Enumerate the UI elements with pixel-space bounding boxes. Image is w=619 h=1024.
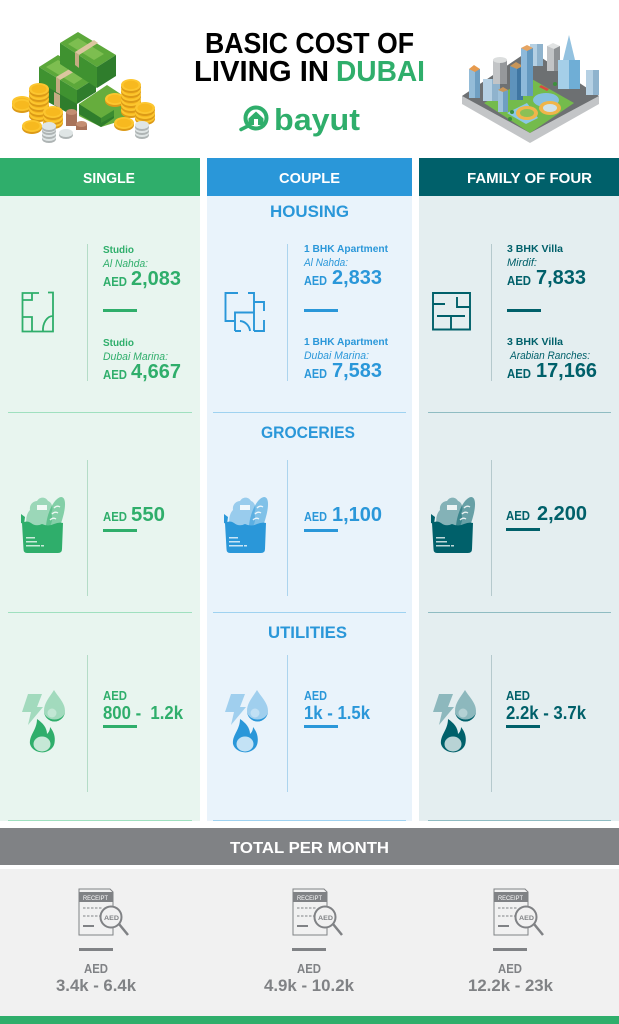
total: family of four: 12.2k - 23k (468, 976, 554, 995)
housing prices: couple: 1 BHK Apartment (304, 336, 388, 348)
header: single (0, 158, 200, 196)
illustration: money and coins (12, 32, 155, 143)
header: family of four: FAMILY OF FOUR (467, 170, 592, 187)
utilities price: single: 800 - 1.2k (103, 703, 184, 723)
icon: groceries (21, 497, 65, 553)
groceries price: single (103, 504, 165, 532)
housing prices: couple: 7,583 (332, 360, 382, 382)
total: single (56, 889, 137, 995)
utilities price: family (506, 689, 587, 728)
panel: couple column (207, 158, 412, 821)
groceries price: family: 2,200 (537, 503, 587, 525)
heading: total per month (0, 828, 619, 865)
utilities price: couple: AED (304, 689, 327, 703)
groceries price: couple (304, 504, 382, 532)
icon: receipt: RECEIPT (83, 895, 108, 902)
icon: studio floor plan (22, 292, 53, 332)
housing prices: family: Mirdif: (507, 257, 537, 269)
header: family of four (419, 158, 619, 196)
groceries price: single: AED (103, 510, 127, 524)
housing prices: family: 3 BHK Villa (507, 243, 563, 255)
icon: villa floor plan (433, 293, 470, 330)
groceries price: couple: AED (304, 510, 327, 524)
utilities price: family: 2.2k - 3.7k (506, 703, 587, 723)
panel: family of four column (419, 158, 619, 821)
header: single: SINGLE (83, 170, 135, 187)
housing prices: family: AED (507, 274, 531, 288)
housing prices: single: AED (103, 275, 127, 289)
total: family of four: AED (498, 962, 522, 976)
icon: receipt (293, 889, 342, 935)
housing prices: single: AED (103, 368, 127, 382)
groceries price: family (506, 503, 587, 531)
housing prices: family (507, 243, 597, 382)
header: couple (207, 158, 412, 196)
housing prices: family: 7,833 (536, 267, 586, 289)
icon: receipt: AED (318, 915, 333, 922)
utilities price: family: AED (506, 689, 530, 703)
housing prices: single: 4,667 (131, 361, 181, 383)
logo: bayut (241, 102, 360, 137)
total: couple (264, 889, 355, 995)
footer bar (0, 1016, 619, 1024)
icon: groceries (224, 497, 268, 553)
housing prices: single (102, 244, 181, 383)
heading: utilities: UTILITIES (268, 623, 347, 642)
total: couple: 4.9k - 10.2k (264, 976, 355, 995)
utilities price: single (103, 689, 184, 728)
heading: groceries: GROCERIES (261, 423, 355, 442)
housing prices: couple: Al Nahda: (303, 257, 348, 269)
icon: utilities (225, 690, 268, 752)
housing prices: single: Dubai Marina: (103, 351, 168, 363)
heading: total per month: TOTAL PER MONTH (230, 840, 389, 857)
utilities price: couple: 1k - 1.5k (304, 703, 371, 723)
title: BASIC COST OF (205, 28, 414, 60)
groceries price: family: AED (506, 509, 530, 523)
icon: utilities (433, 690, 476, 752)
housing prices: family: Arabian Ranches: (509, 350, 590, 362)
housing prices: couple: 2,833 (332, 267, 382, 289)
title: DUBAI (336, 56, 425, 88)
total: family of four (468, 889, 554, 995)
logo: bayut: bayut (274, 102, 360, 137)
illustration: city block (462, 35, 599, 143)
icon: utilities (22, 690, 65, 752)
utilities price: single: AED (103, 689, 127, 703)
icon: one bedroom floor plan (226, 293, 264, 331)
total: single: 3.4k - 6.4k (56, 976, 137, 995)
utilities price: couple (304, 689, 371, 728)
housing prices: couple: AED (304, 367, 327, 381)
groceries price: couple: 1,100 (332, 504, 382, 526)
housing prices: family: 17,166 (536, 360, 597, 382)
housing prices: couple: Dubai Marina: (304, 350, 369, 362)
housing prices: couple: AED (304, 274, 327, 288)
icon: groceries (431, 497, 475, 553)
housing prices: family: AED (507, 367, 531, 381)
icon: receipt: RECEIPT (297, 895, 322, 902)
icon: receipt: AED (519, 915, 534, 922)
panel: total per month (0, 828, 619, 1016)
icon: receipt (494, 889, 543, 935)
icon: receipt: RECEIPT (498, 895, 523, 902)
heading: housing: HOUSING (270, 202, 349, 221)
housing prices: single: Al Nahda: (102, 258, 148, 270)
housing prices: couple (303, 243, 388, 382)
header: couple: COUPLE (279, 170, 340, 187)
total: single: AED (84, 962, 108, 976)
title: LIVING IN (194, 56, 329, 88)
housing prices: family: 3 BHK Villa (507, 336, 563, 348)
housing prices: couple: 1 BHK Apartment (304, 243, 388, 255)
total: couple: AED (297, 962, 321, 976)
icon: receipt: AED (104, 915, 119, 922)
housing prices: single: 2,083 (131, 268, 181, 290)
groceries price: single: 550 (131, 504, 165, 526)
title (194, 28, 425, 88)
housing prices: single: Studio (103, 244, 134, 256)
panel: single column (0, 158, 200, 821)
housing prices: single: Studio (103, 337, 134, 349)
icon: receipt (79, 889, 128, 935)
